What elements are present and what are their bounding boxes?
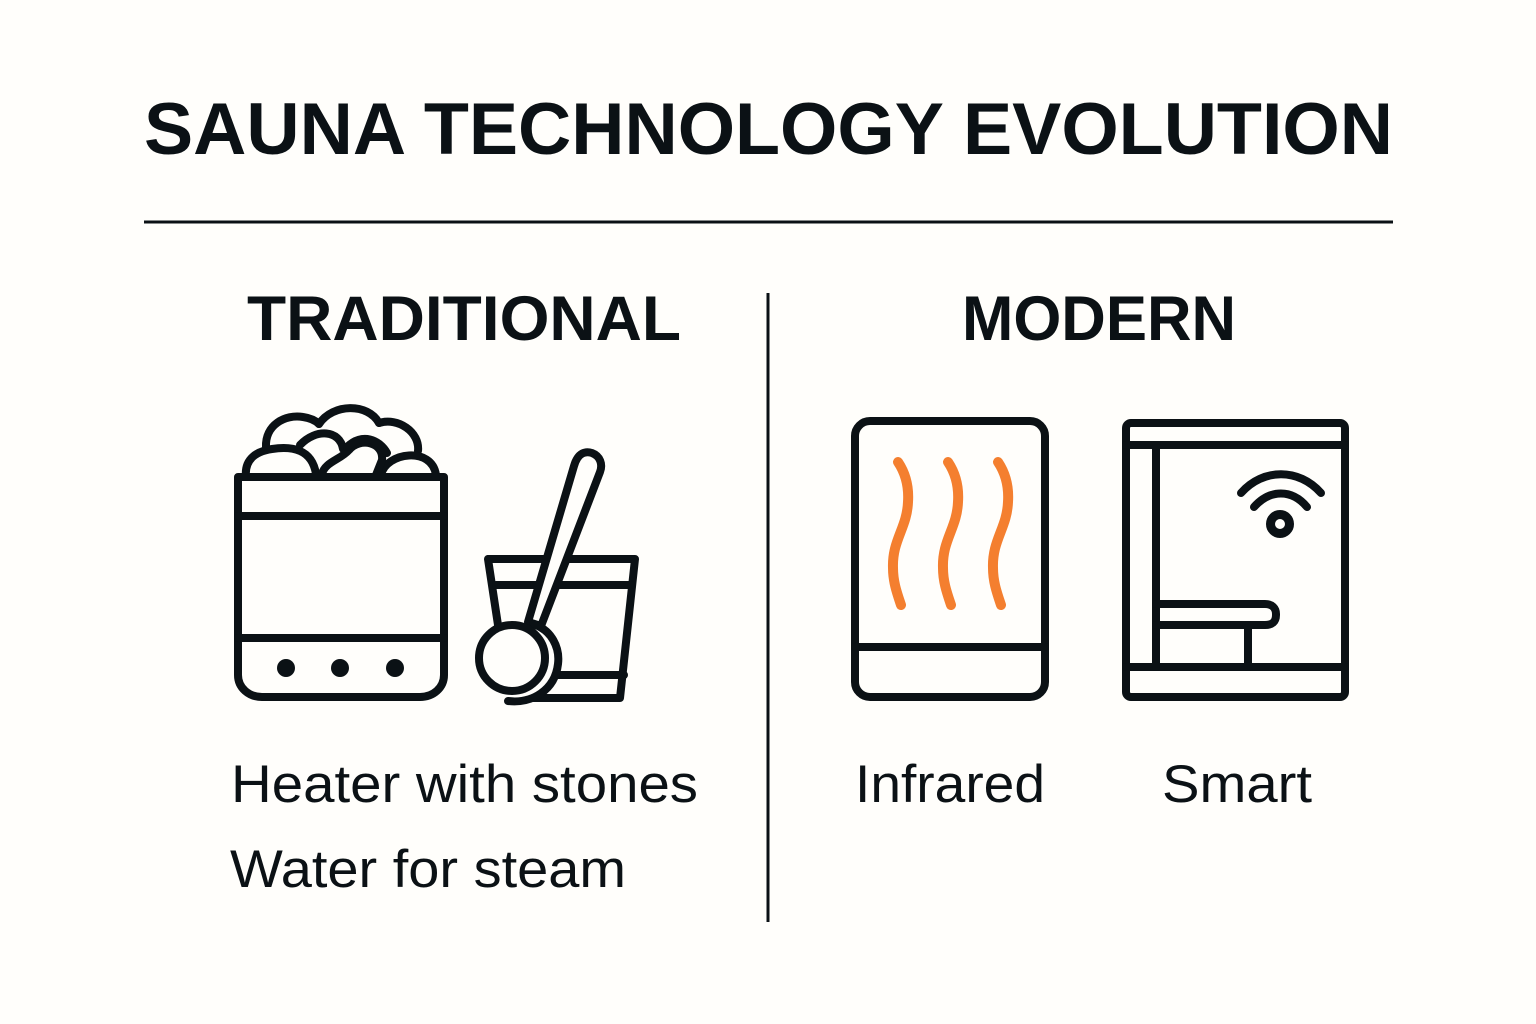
icon: bucket and ladle [479,452,635,701]
icon: infrared panel [855,421,1045,697]
panel: traditional [230,284,698,899]
label: smart: Smart [1162,755,1312,814]
heat waves [893,462,1008,605]
label: heater with stones: Heater with stones [231,755,698,814]
label: infrared: Infrared [855,755,1045,814]
icon: smart sauna [1126,423,1345,697]
heading: traditional: TRADITIONAL [247,284,681,354]
panel: modern [855,284,1345,814]
wifi symbol [1241,474,1321,534]
icon: heater with stones [238,408,444,697]
label: water for steam: Water for steam [230,840,626,899]
title: SAUNA TECHNOLOGY EVOLUTION [144,89,1393,170]
heading: modern: MODERN [962,284,1236,354]
